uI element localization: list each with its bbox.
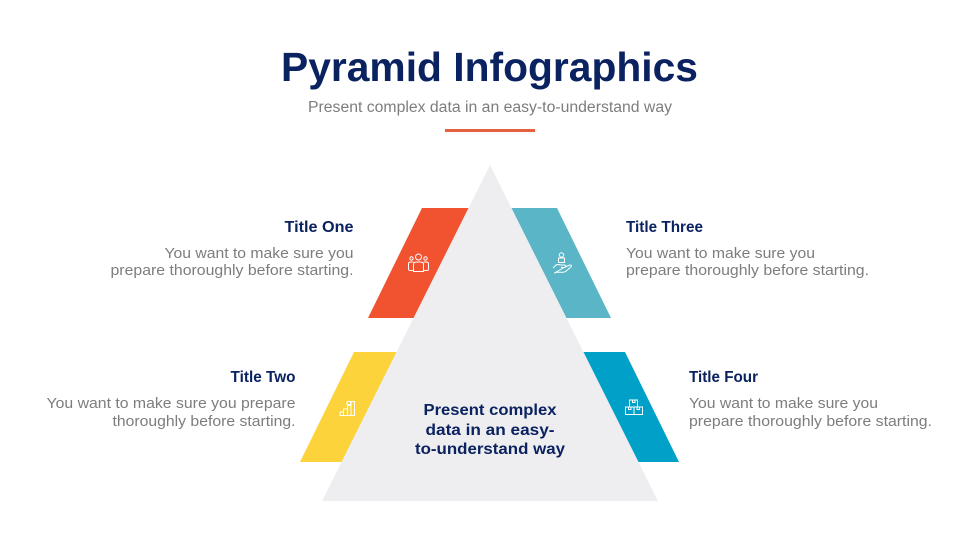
- panel: yellow parallelogram: [300, 352, 403, 462]
- panel: blue parallelogram: [577, 352, 679, 462]
- text block: Title One: prepare thoroughly before starting.: [110, 263, 354, 279]
- text block: Title Two: thoroughly before starting.: [112, 414, 296, 430]
- text block: Title Two: Title Two: [230, 369, 296, 386]
- text block: Title Three: [626, 219, 869, 279]
- text block: Title One: Title One: [284, 219, 354, 236]
- subtitle: Present complex data in an easy-to-understand way: [308, 99, 672, 116]
- text block: Title Three: prepare thoroughly before starting.: [626, 263, 869, 279]
- panel: teal parallelogram: [505, 208, 611, 318]
- text block: Title One: [110, 219, 354, 279]
- text block: Title Four: You want to make sure you: [689, 396, 878, 412]
- text block: Title Three: Title Three: [626, 219, 703, 236]
- icon: hand holding person: [553, 253, 572, 273]
- text block: Title One: You want to make sure you: [164, 246, 354, 262]
- pyramid: [322, 165, 658, 501]
- pyramid text: to-understand way: [415, 441, 565, 458]
- icon: rising bars: [340, 402, 354, 416]
- text block: Title Three: You want to make sure you: [626, 246, 815, 262]
- text block: Title Four: Title Four: [689, 369, 758, 386]
- title: Pyramid Infographics: [281, 44, 698, 90]
- icon: people: [408, 254, 428, 272]
- pyramid text: data in an easy-: [426, 422, 554, 439]
- accent underline: [445, 129, 535, 132]
- text block: Title Two: You want to make sure you prepare: [46, 396, 296, 412]
- text block: Title Four: [689, 369, 932, 430]
- icon: stacked boxes: [626, 400, 642, 414]
- pyramid text: [415, 402, 565, 458]
- text block: Title Four: prepare thoroughly before starting.: [689, 414, 932, 430]
- pyramid text: Present complex: [424, 402, 557, 419]
- text block: Title Two: [46, 369, 296, 430]
- panel: red parallelogram: [368, 208, 475, 318]
